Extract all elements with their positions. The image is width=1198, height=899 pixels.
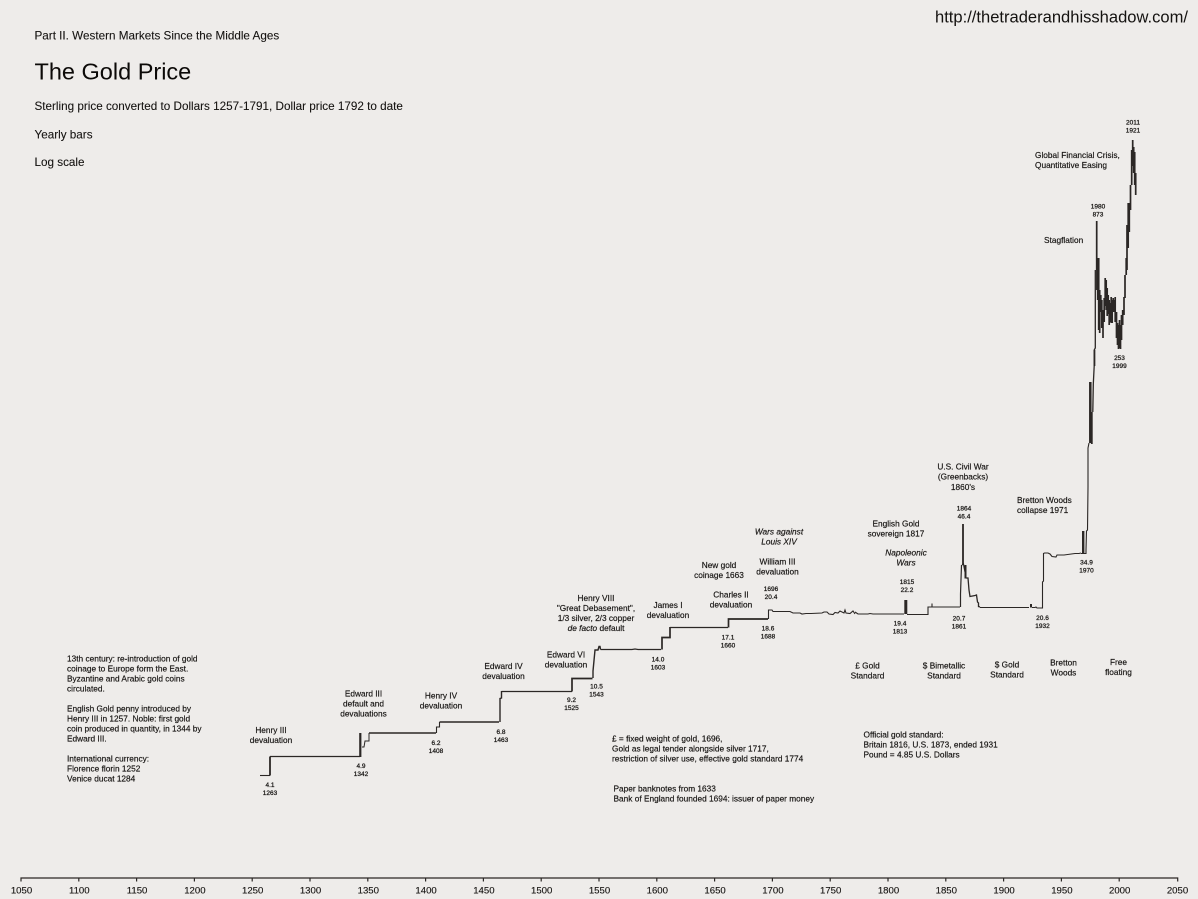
New gold coinage: New gold xyxy=(702,560,737,570)
1408: 1408 xyxy=(429,748,444,755)
1861: 20.7 xyxy=(953,616,966,623)
time axis: 1700 xyxy=(762,886,784,896)
header block xyxy=(34,30,403,169)
1864: 1864 xyxy=(957,506,972,513)
time axis: 2050 xyxy=(1167,886,1188,896)
1813: 1813 xyxy=(893,629,908,636)
note: official gold standard: Pound = 4.85 U.S. Dollars xyxy=(864,750,960,760)
subtitle: scale: Log scale xyxy=(34,156,85,169)
time axis: 1300 xyxy=(300,886,321,896)
2011: 2011 xyxy=(1126,120,1140,127)
1999: 1999 xyxy=(1112,363,1127,370)
Bretton Woods: Woods xyxy=(1051,668,1076,678)
Henry III: Henry III xyxy=(255,725,287,735)
1932: 20.6 xyxy=(1036,615,1049,622)
1815: 22.2 xyxy=(901,587,914,594)
Bretton Woods: Bretton xyxy=(1050,658,1077,668)
left note: 13th century: coin produced in quantity, in 1344 by xyxy=(67,724,202,734)
1342: 1342 xyxy=(354,771,369,778)
pound gold standard: Standard xyxy=(851,671,885,681)
1463: 1463 xyxy=(494,737,509,744)
Wars against Louis XIV: Louis XIV xyxy=(761,537,798,547)
Global Financial Crisis: Global Financial Crisis, xyxy=(1035,150,1120,160)
note: pound and gold: Gold as legal tender alongside silver 1717, xyxy=(612,744,769,754)
Napoleonic Wars: Napoleonic xyxy=(885,548,928,558)
1543: 1543 xyxy=(589,692,604,699)
1970: 1970 xyxy=(1079,568,1094,575)
Henry IV: devaluation xyxy=(420,701,463,711)
annotations: price and year values xyxy=(263,120,1141,797)
left note: 13th century: 13th century: re-introduction of gold xyxy=(67,654,198,664)
time axis: 1250 xyxy=(242,886,263,896)
Edward III: default and xyxy=(343,699,384,709)
U.S. Civil War: U.S. Civil War xyxy=(937,462,989,472)
1932: 1932 xyxy=(1035,623,1050,630)
1864: 46.4 xyxy=(958,514,971,521)
dollar bimetallic standard: Standard xyxy=(927,671,961,681)
note: pound and gold xyxy=(612,734,804,764)
free floating: floating xyxy=(1105,667,1132,677)
1342: 4.9 xyxy=(356,763,366,770)
1815: 1815 xyxy=(900,579,915,586)
Henry VIII: "Great Debasement", xyxy=(557,603,635,613)
Henry VIII: Henry VIII xyxy=(578,593,614,603)
Edward III: devaluations xyxy=(340,709,387,719)
Charles II: Charles II xyxy=(713,590,749,600)
1688: 1688 xyxy=(761,634,776,641)
source url: http://thetraderandhisshadow.com/ xyxy=(935,8,1188,26)
time axis: 1150 xyxy=(127,886,147,896)
note: paper money: Paper banknotes from 1633 xyxy=(614,784,716,794)
time axis: 1400 xyxy=(415,886,437,896)
1525: 1525 xyxy=(564,705,579,712)
time axis: 1600 xyxy=(647,886,668,896)
William III: devaluation xyxy=(756,567,799,577)
price line 1350 to 1700 xyxy=(369,732,436,734)
1999: 253 xyxy=(1114,355,1125,362)
Edward IV: Edward IV xyxy=(484,661,523,671)
U.S. Civil War: (Greenbacks) xyxy=(938,472,988,482)
note: pound and gold: £ = fixed weight of gold, 1696, xyxy=(612,734,722,744)
Napoleonic Wars: Wars xyxy=(896,558,916,568)
Charles II: devaluation xyxy=(710,600,753,610)
left note: 13th century xyxy=(67,654,202,784)
monetary regime labels xyxy=(851,657,1132,681)
Edward IV: devaluation xyxy=(482,671,525,681)
English Gold sovereign: sovereign 1817 xyxy=(868,529,925,539)
1408: 6.2 xyxy=(431,740,441,747)
time axis: 1950 xyxy=(1051,886,1073,896)
Bretton Woods collapse: Bretton Woods xyxy=(1017,495,1072,505)
left note: 13th century: English Gold penny introduced by xyxy=(67,704,192,714)
time axis xyxy=(11,878,1188,896)
1263: 1263 xyxy=(263,790,278,797)
1603: 1603 xyxy=(651,665,666,672)
time axis: 1100 xyxy=(69,886,90,896)
Edward III: Edward III xyxy=(345,689,382,699)
1696: 20.4 xyxy=(765,594,778,601)
note: pound and gold: restriction of silver use, effective gold standard 1774 xyxy=(612,754,804,764)
dollar bimetallic standard: $ Bimetallic xyxy=(923,661,965,671)
2011: 1921 xyxy=(1126,128,1141,135)
subtitle: bars: Yearly bars xyxy=(34,128,93,141)
time axis: 1500 xyxy=(531,886,552,896)
left note: 13th century: Florence florin 1252 xyxy=(67,764,141,774)
note: paper money: Bank of England founded 1694: issuer of paper money xyxy=(614,794,815,804)
left note: 13th century: Henry III in 1257. Noble: first gold xyxy=(67,714,191,724)
note: official gold standard: Official gold standard: xyxy=(864,730,944,740)
left note: 13th century: circulated. xyxy=(67,684,105,694)
subtitle: currency: Sterling price converted to Dollars 1257-1791, Dollar price 1792 to date xyxy=(34,100,403,113)
price line 1257 to 1345 xyxy=(260,774,270,776)
annotations: event labels xyxy=(250,150,1120,745)
Edward VI: Edward VI xyxy=(547,650,585,660)
price line 1970 to 1980 rise xyxy=(1089,382,1092,443)
1861: 1861 xyxy=(952,624,967,631)
note: official gold standard xyxy=(864,730,998,760)
price line 1750 to 1860 xyxy=(855,612,904,614)
Bretton Woods collapse: collapse 1971 xyxy=(1017,505,1069,515)
1660: 1660 xyxy=(721,642,736,650)
dollar gold standard: Standard xyxy=(990,670,1024,680)
time axis: 1200 xyxy=(184,886,206,896)
1543: 10.5 xyxy=(590,684,603,691)
1263: 4.1 xyxy=(265,782,275,789)
pound gold standard: £ Gold xyxy=(855,661,880,671)
Henry VIII: de facto default xyxy=(568,623,624,633)
left note: 13th century: International currency: xyxy=(67,754,149,764)
William III: William III xyxy=(760,557,795,567)
note: official gold standard: Britain 1816, U.S. 1873, ended 1931 xyxy=(864,740,998,750)
left note: 13th century: coinage to Europe form the East. xyxy=(67,664,188,674)
1980: 873 xyxy=(1093,212,1104,219)
U.S. Civil War: 1860's xyxy=(951,482,975,492)
1660: 17.1 xyxy=(722,634,735,642)
1603: 14.0 xyxy=(652,657,665,664)
time axis: 2000 xyxy=(1109,886,1130,896)
title: The Gold Price xyxy=(34,58,191,84)
1696: 1696 xyxy=(764,586,779,593)
gold price line chart xyxy=(260,140,1136,776)
time axis: 1850 xyxy=(936,886,957,896)
note: paper money xyxy=(614,784,815,804)
time axis: 1350 xyxy=(358,886,379,896)
Henry IV: Henry IV xyxy=(425,691,458,701)
James I: James I xyxy=(653,600,683,610)
James I: devaluation xyxy=(647,610,690,620)
time axis: 1050 xyxy=(11,886,32,896)
New gold coinage: coinage 1663 xyxy=(694,570,744,580)
Henry VIII: 1/3 silver, 2/3 copper xyxy=(558,613,635,623)
section label: Part II. Western Markets Since the Middle Ages xyxy=(34,30,279,42)
time axis: 1550 xyxy=(589,886,610,896)
civil war spike xyxy=(960,565,962,607)
left note: 13th century: Byzantine and Arabic gold coins xyxy=(67,674,185,684)
Henry III: devaluation xyxy=(250,735,293,745)
time axis: 1900 xyxy=(993,886,1015,896)
price line 1880 to 1970 xyxy=(980,606,1029,608)
1970: 34.9 xyxy=(1080,560,1093,567)
yearly bars 1980 to 2013 xyxy=(1097,140,1136,349)
1980: 1980 xyxy=(1091,204,1106,211)
1813: 19.4 xyxy=(894,621,907,628)
1688: 18.6 xyxy=(762,626,775,633)
English Gold sovereign: English Gold xyxy=(872,519,920,529)
dollar gold standard: $ Gold xyxy=(995,660,1020,670)
time axis: 1750 xyxy=(820,886,841,896)
Stagflation: Stagflation xyxy=(1044,235,1084,245)
left note: 13th century: Venice ducat 1284 xyxy=(67,774,136,784)
left note: 13th century: Edward III. xyxy=(67,734,107,744)
Edward VI: devaluation xyxy=(545,660,588,670)
1525: 9.2 xyxy=(567,697,576,704)
time axis: 1650 xyxy=(704,886,726,896)
time axis: 1450 xyxy=(473,886,495,896)
Global Financial Crisis: Quantitative Easing xyxy=(1035,160,1107,170)
time axis: 1800 xyxy=(878,886,899,896)
free floating: Free xyxy=(1110,657,1127,667)
Wars against Louis XIV: Wars against xyxy=(755,527,804,537)
1463: 6.8 xyxy=(496,729,506,736)
